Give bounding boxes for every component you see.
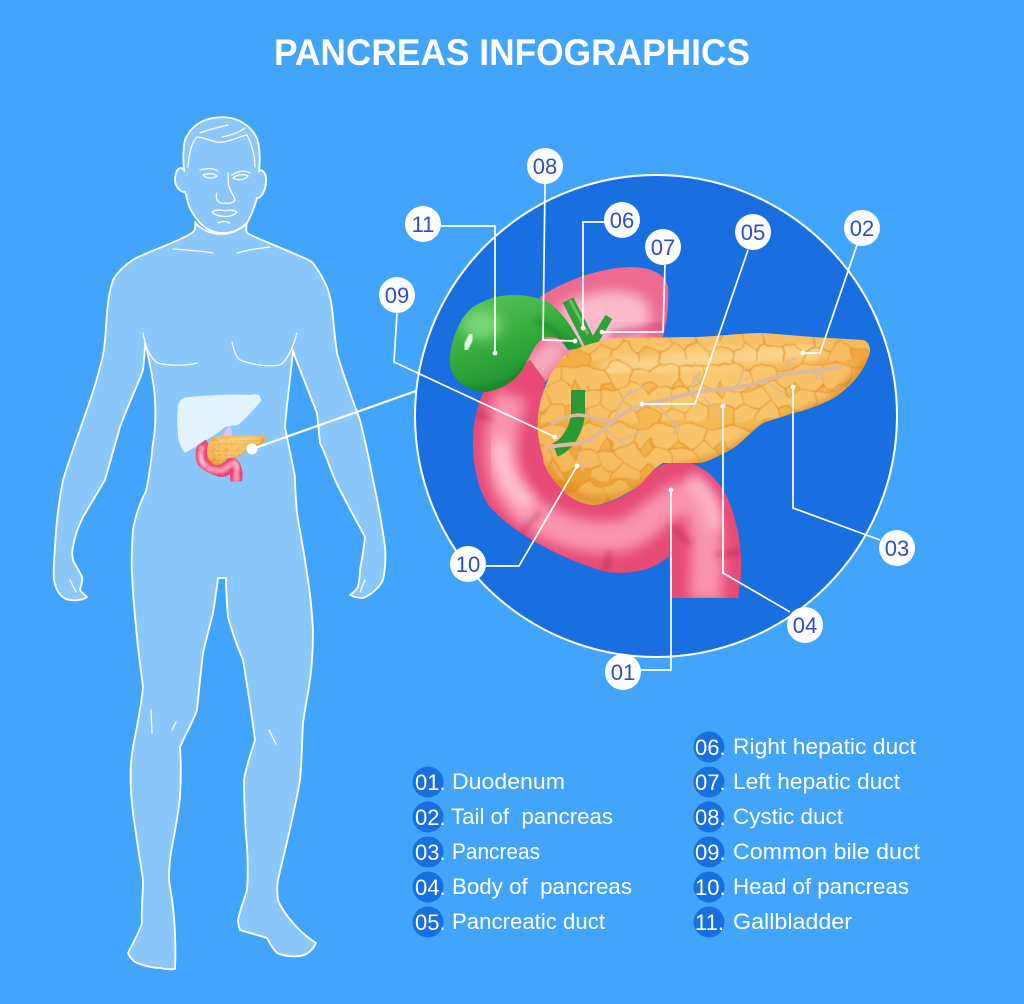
leader line end dots bbox=[493, 326, 805, 492]
legend column 2: 10. bbox=[695, 875, 726, 900]
body silhouette bbox=[54, 222, 385, 969]
legend column 2: Head of pancreas bbox=[733, 874, 909, 899]
number badges: 01 bbox=[611, 660, 635, 685]
number badges: 09 bbox=[385, 283, 409, 308]
legend column 2: 11. bbox=[695, 910, 724, 935]
common bile duct bbox=[555, 390, 578, 450]
legend column 2: 08. bbox=[695, 805, 726, 830]
bile duct sliver bbox=[223, 426, 232, 436]
legend column 2: Left hepatic duct bbox=[733, 769, 900, 794]
duodenum upper loop bbox=[483, 267, 668, 400]
hairline and facial features bbox=[70, 125, 365, 744]
pointer from body to magnified circle bbox=[246, 391, 416, 454]
number badges: 10 bbox=[456, 552, 480, 577]
head bbox=[175, 117, 266, 233]
legend column 2: Cystic duct bbox=[733, 804, 843, 829]
legend column 2: Common bile duct bbox=[733, 839, 920, 864]
legend column 1: Pancreatic duct bbox=[452, 909, 605, 934]
legend column 1: Body of pancreas bbox=[452, 874, 632, 899]
legend column 1: Tail of pancreas bbox=[451, 804, 613, 829]
magnified circle bbox=[415, 175, 897, 657]
number badges: 03 bbox=[885, 536, 909, 561]
organ illustration bbox=[450, 267, 885, 600]
number badges: 07 bbox=[651, 235, 675, 260]
leader lines bbox=[394, 184, 880, 670]
legend column 2 bbox=[694, 732, 920, 938]
legend column 2: Right hepatic duct bbox=[733, 734, 916, 759]
liver bbox=[177, 394, 261, 453]
number badges: 02 bbox=[850, 216, 874, 241]
number badges: 11 bbox=[412, 212, 434, 237]
pancreatic duct bbox=[547, 358, 840, 470]
number badges bbox=[379, 148, 915, 690]
bile ducts bbox=[568, 300, 609, 345]
legend column 1: Pancreas bbox=[452, 839, 540, 864]
small pancreas and duodenum bbox=[195, 432, 268, 482]
gallbladder bbox=[450, 295, 582, 392]
duodenum lower loop bbox=[472, 360, 742, 600]
legend column 1: 03. bbox=[415, 840, 446, 865]
legend column 1: Duodenum bbox=[452, 769, 565, 794]
pancreas bbox=[520, 315, 885, 520]
number badges: 06 bbox=[610, 208, 634, 233]
legend column 2: 07. bbox=[695, 770, 726, 795]
legend column 2: 06. bbox=[695, 735, 726, 760]
legend column 1 bbox=[412, 766, 632, 938]
number badges: 05 bbox=[741, 220, 765, 245]
legend column 2: Gallbladder bbox=[733, 909, 852, 934]
legend column 1: 02. bbox=[415, 805, 446, 830]
number badges: 04 bbox=[793, 613, 817, 638]
title: PANCREAS INFOGRAPHICS bbox=[274, 32, 750, 73]
legend column 1: 01. bbox=[415, 770, 446, 795]
legend column 2: 09. bbox=[695, 840, 726, 865]
legend column 1: 04. bbox=[415, 875, 446, 900]
number badges: 08 bbox=[533, 154, 557, 179]
human body figure bbox=[54, 117, 385, 969]
legend bbox=[412, 732, 920, 938]
legend column 1: 05. bbox=[415, 910, 446, 935]
